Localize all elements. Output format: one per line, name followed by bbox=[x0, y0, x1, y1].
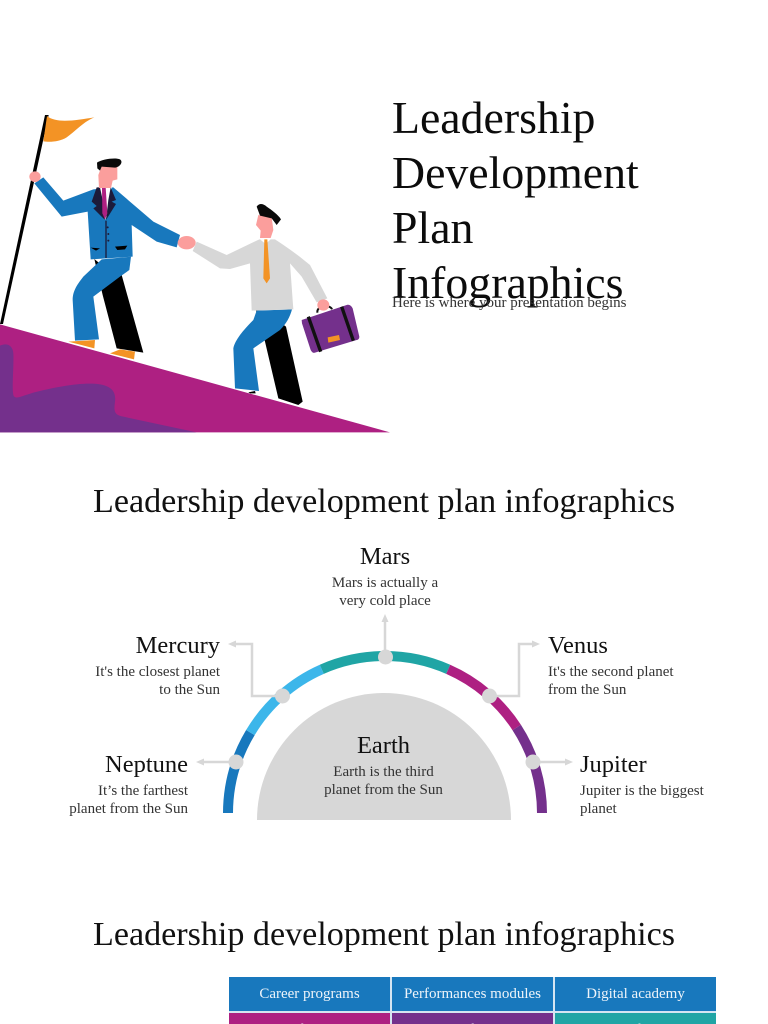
table: Digital academy bbox=[586, 986, 685, 1002]
table: Performances modules bbox=[404, 986, 541, 1002]
label: Mars: Mars is actually a bbox=[332, 575, 438, 591]
title bbox=[392, 92, 639, 308]
title: Infographics bbox=[392, 257, 623, 308]
label: Earth: Earth is the third bbox=[333, 764, 434, 780]
label: Venus: from the Sun bbox=[548, 682, 626, 698]
arc segments bbox=[228, 656, 542, 813]
heading: section 3: Leadership development plan infographics bbox=[93, 916, 675, 953]
label: Neptune bbox=[69, 751, 188, 817]
title: Development bbox=[392, 147, 639, 198]
label: Mars: Mars bbox=[360, 543, 410, 570]
label: Neptune: It’s the farthest bbox=[98, 783, 188, 799]
label: Mercury: Mercury bbox=[136, 632, 220, 659]
figure: colleague with briefcase bbox=[178, 204, 359, 405]
label: Venus: Venus bbox=[548, 632, 608, 659]
label: Earth: Earth bbox=[357, 732, 410, 759]
label: Jupiter: Jupiter is the biggest bbox=[580, 783, 704, 799]
illustration: leaders climbing bbox=[0, 115, 390, 432]
label: Venus: It's the second planet bbox=[548, 664, 674, 680]
label: Mercury: to the Sun bbox=[159, 682, 220, 698]
table bbox=[229, 977, 716, 1024]
semicircle diagram bbox=[196, 614, 573, 820]
title: Leadership bbox=[392, 92, 595, 143]
label: Jupiter: Jupiter bbox=[580, 751, 647, 778]
label: Mercury: It's the closest planet bbox=[95, 664, 220, 680]
figure: leader in blue suit bbox=[29, 159, 180, 359]
label: Venus bbox=[548, 632, 674, 698]
label: Mercury bbox=[95, 632, 220, 698]
connector arrows bbox=[202, 620, 567, 762]
label: Neptune: Neptune bbox=[105, 751, 188, 778]
table: Career programs bbox=[259, 986, 360, 1002]
icon: flag bbox=[0, 115, 94, 324]
heading: section 2: Leadership development plan infographics bbox=[93, 483, 675, 520]
label: Mars bbox=[332, 543, 438, 609]
label: Mars: very cold place bbox=[339, 593, 431, 609]
subtitle: Here is where your presentation begins bbox=[392, 295, 627, 311]
nodes bbox=[228, 650, 540, 770]
earth semicircle bbox=[257, 693, 511, 820]
title: Plan bbox=[392, 202, 473, 253]
label: Jupiter bbox=[580, 751, 704, 817]
label: Jupiter: planet bbox=[580, 801, 617, 817]
label: Earth: planet from the Sun bbox=[324, 782, 443, 798]
label: Earth bbox=[324, 732, 443, 798]
label: Neptune: planet from the Sun bbox=[69, 801, 188, 817]
mountain slope bbox=[0, 324, 390, 432]
